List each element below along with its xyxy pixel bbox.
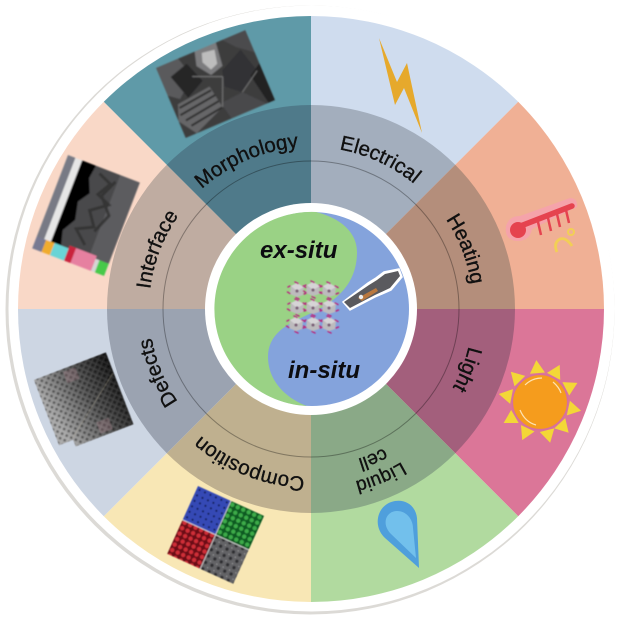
panel: composition (104, 309, 311, 602)
inner ring line (163, 161, 459, 457)
panel: electrical (311, 16, 518, 309)
center circle (205, 203, 417, 415)
label: Composition: Composition (196, 436, 304, 491)
label: ex-situ: ex-situ (260, 237, 338, 264)
panel: morphology (104, 16, 311, 309)
icon: TEM holder probe (343, 269, 402, 310)
label: Liquid cell: Liquid (356, 462, 407, 494)
panel: interface (18, 102, 311, 309)
icon: thermometer (506, 198, 577, 252)
image: atomic lattice (34, 352, 133, 452)
icon: sun (497, 360, 583, 445)
label: Heating: Heating (446, 213, 482, 284)
image: cross-section micrograph (32, 155, 140, 276)
label: Electrical: Electrical (340, 136, 422, 184)
image: grain micrograph (156, 30, 275, 138)
icon: lightning bolt (379, 38, 422, 133)
label: Liquid cell: cell (358, 449, 386, 472)
label: Light: Light (452, 348, 482, 393)
panel: liquid cell (311, 309, 518, 602)
green half of yin-yang (214, 212, 357, 406)
image: elemental maps (167, 486, 264, 584)
label: Defects: Defects (141, 338, 177, 408)
label: in-situ: in-situ (288, 357, 360, 384)
label: Morphology: Morphology (194, 136, 298, 188)
panel: defects (18, 309, 311, 516)
label: Interface: Interface (136, 212, 177, 288)
panel: heating (311, 102, 604, 309)
icon: crystal lattice (286, 281, 338, 333)
icon: water drop (378, 501, 419, 568)
panel: light (311, 309, 604, 516)
